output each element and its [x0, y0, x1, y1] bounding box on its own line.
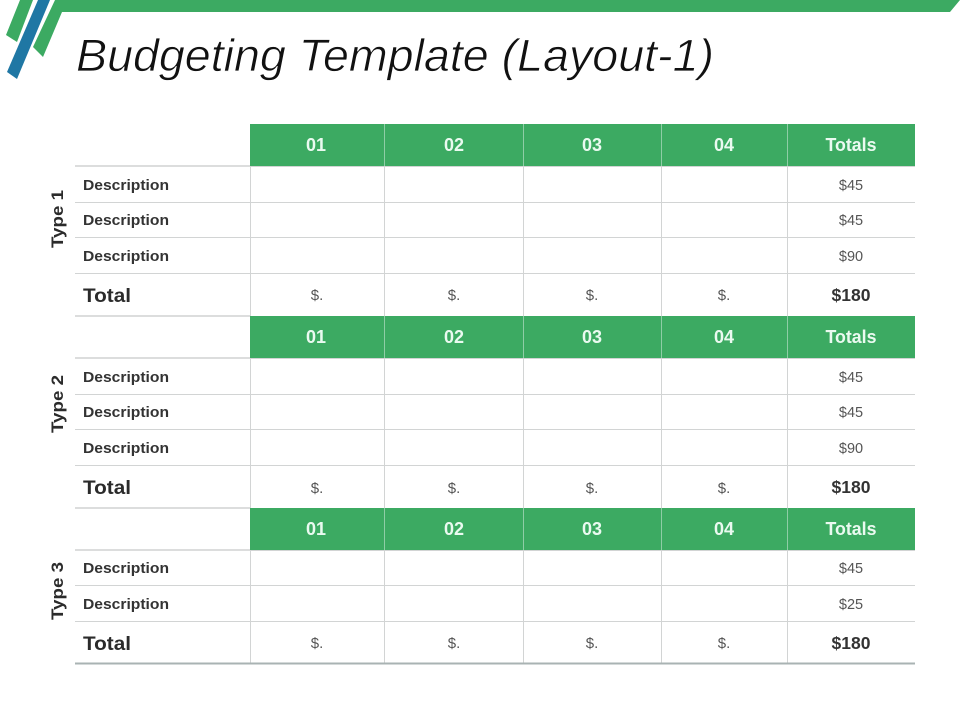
type 1 total row: $.	[448, 287, 460, 304]
type 3 row values: $45	[839, 561, 863, 577]
type 2 descriptions: Description	[83, 440, 169, 457]
section: type 1	[48, 135, 876, 307]
type 1 column headers	[306, 135, 876, 155]
type 2 descriptions: Description	[83, 404, 169, 421]
type 1 row values: $90	[839, 249, 863, 265]
type 3 total row	[83, 633, 871, 655]
type 3 descriptions: Description	[83, 596, 169, 613]
type 3 total row: Total	[83, 634, 131, 655]
type 3 column headers: 04	[714, 519, 734, 539]
type 1 column headers: 02	[444, 135, 464, 155]
type 1 row values: $45	[839, 178, 863, 194]
type 1 descriptions: Description	[83, 177, 169, 194]
type 1 descriptions: Description	[83, 248, 169, 265]
type 1 total row: $.	[311, 287, 323, 304]
type 2 total row: $.	[311, 480, 323, 497]
type 2 label: Type 2	[48, 375, 67, 433]
type 1 column headers: 01	[306, 135, 326, 155]
section: type 2	[48, 327, 876, 499]
type 3 row values: $25	[839, 597, 863, 613]
type 1 total row: $180	[832, 285, 871, 305]
type 1 descriptions: Description	[83, 212, 169, 229]
type 2 row values: $90	[839, 441, 863, 457]
type 2 row values: $45	[839, 405, 863, 421]
table grid	[75, 124, 915, 664]
type 3 total row: $180	[832, 633, 871, 653]
type 3 column headers: Totals	[826, 519, 876, 539]
type 1 row values	[839, 178, 863, 265]
type 1 label: Type 1	[48, 190, 67, 248]
type 3 total row: $.	[718, 635, 730, 652]
type 3 column headers: 03	[582, 519, 602, 539]
type 1 total row: $.	[586, 287, 598, 304]
type 2 total row: Total	[83, 478, 131, 499]
type 3 total row: $.	[448, 635, 460, 652]
type 3 total row: $.	[311, 635, 323, 652]
type 2 column headers: 03	[582, 327, 602, 347]
title: Budgeting Template (Layout-1)	[76, 30, 714, 81]
type 3 total row: $.	[586, 635, 598, 652]
type 2 row values: $45	[839, 370, 863, 386]
type 2 column headers: 02	[444, 327, 464, 347]
type 2 descriptions	[83, 369, 169, 457]
type 2 descriptions: Description	[83, 369, 169, 386]
type 1 column headers: 03	[582, 135, 602, 155]
section: type 3	[48, 519, 876, 655]
type 3 label: Type 3	[48, 562, 67, 620]
type 2 column headers: 01	[306, 327, 326, 347]
type 1 total row: $.	[718, 287, 730, 304]
type 3 row values	[839, 561, 863, 613]
type 2 column headers: Totals	[826, 327, 876, 347]
type 3 descriptions	[83, 560, 169, 613]
type 2 total row: $.	[448, 480, 460, 497]
type 2 column headers: 04	[714, 327, 734, 347]
type 1 column headers: 04	[714, 135, 734, 155]
type 3 descriptions: Description	[83, 560, 169, 577]
type 1 row values: $45	[839, 213, 863, 229]
type 2 column headers	[306, 327, 876, 347]
type 2 total row: $.	[586, 480, 598, 497]
type 2 total row	[83, 477, 871, 499]
type 2 total row: $.	[718, 480, 730, 497]
type 3 column headers: 02	[444, 519, 464, 539]
type 1 total row: Total	[83, 286, 131, 307]
decorative header band	[6, 0, 960, 79]
type 3 column headers	[306, 519, 876, 539]
type 1 descriptions	[83, 177, 169, 265]
type 2 row values	[839, 370, 863, 457]
type 3 column headers: 01	[306, 519, 326, 539]
type 1 total row	[83, 285, 871, 307]
type 2 total row: $180	[832, 477, 871, 497]
type 1 column headers: Totals	[826, 135, 876, 155]
